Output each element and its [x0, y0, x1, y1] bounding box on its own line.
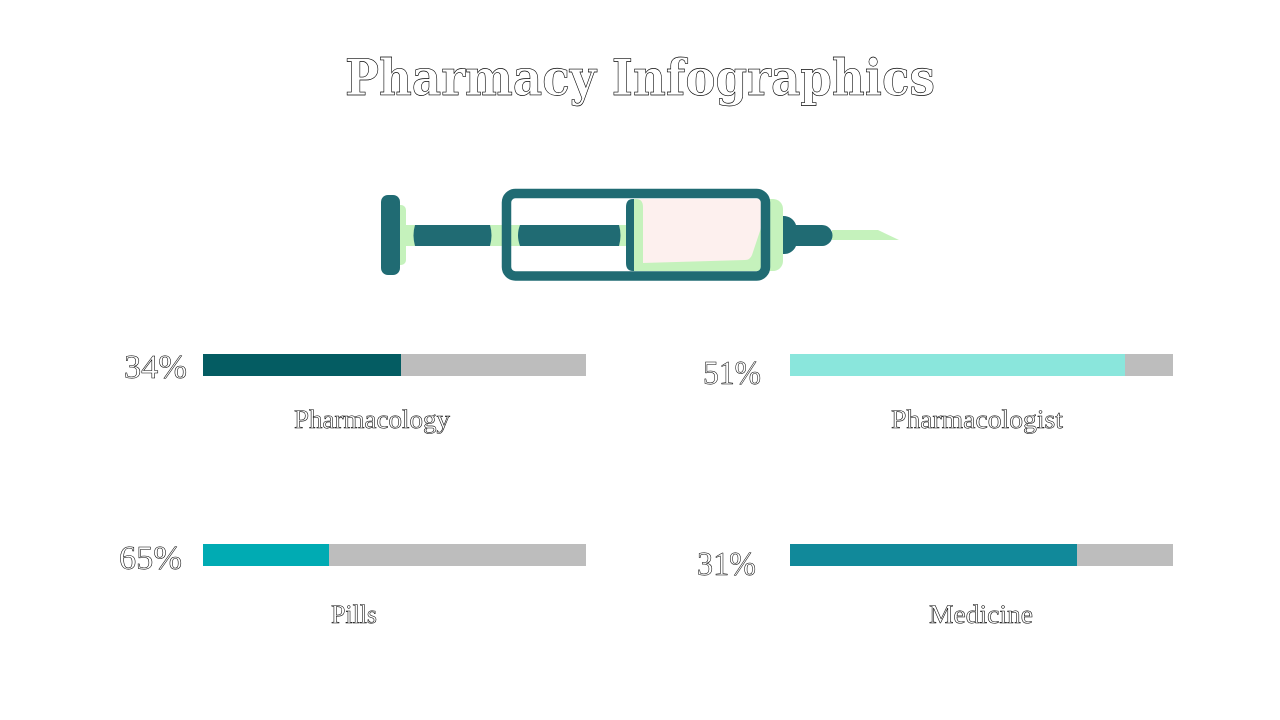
syringe thumb rest	[381, 195, 400, 275]
syringe piston	[626, 199, 634, 271]
percent: 51%	[703, 355, 761, 392]
percent: 34%	[124, 349, 187, 386]
icon: syringe	[381, 194, 899, 276]
panel: pills	[119, 540, 586, 629]
syringe barrel flange	[750, 199, 783, 271]
syringe liquid shade	[634, 228, 761, 271]
bar	[790, 544, 1173, 566]
bar	[790, 354, 1173, 376]
panel: medicine	[697, 544, 1173, 629]
syringe thumb rest light	[390, 205, 406, 265]
label: Medicine	[929, 600, 1033, 629]
percent: 31%	[697, 546, 756, 583]
panel: pharmacologist	[703, 354, 1173, 434]
panel: pharmacology	[124, 349, 586, 434]
syringe plunger rod dark front	[414, 225, 492, 246]
percent: 65%	[119, 540, 182, 577]
title: Pharmacy Infographics	[345, 48, 935, 107]
label: Pills	[331, 600, 377, 629]
label: Pharmacology	[294, 405, 450, 434]
syringe plunger rod dark back	[518, 225, 620, 246]
syringe barrel	[506, 194, 766, 276]
label: Pharmacologist	[891, 405, 1064, 434]
syringe needle	[832, 230, 899, 240]
syringe liquid	[634, 199, 762, 271]
syringe piston light	[634, 199, 643, 271]
syringe plunger rod light	[395, 225, 635, 246]
bar	[203, 354, 586, 376]
bar	[203, 544, 586, 566]
syringe nozzle	[783, 216, 832, 254]
